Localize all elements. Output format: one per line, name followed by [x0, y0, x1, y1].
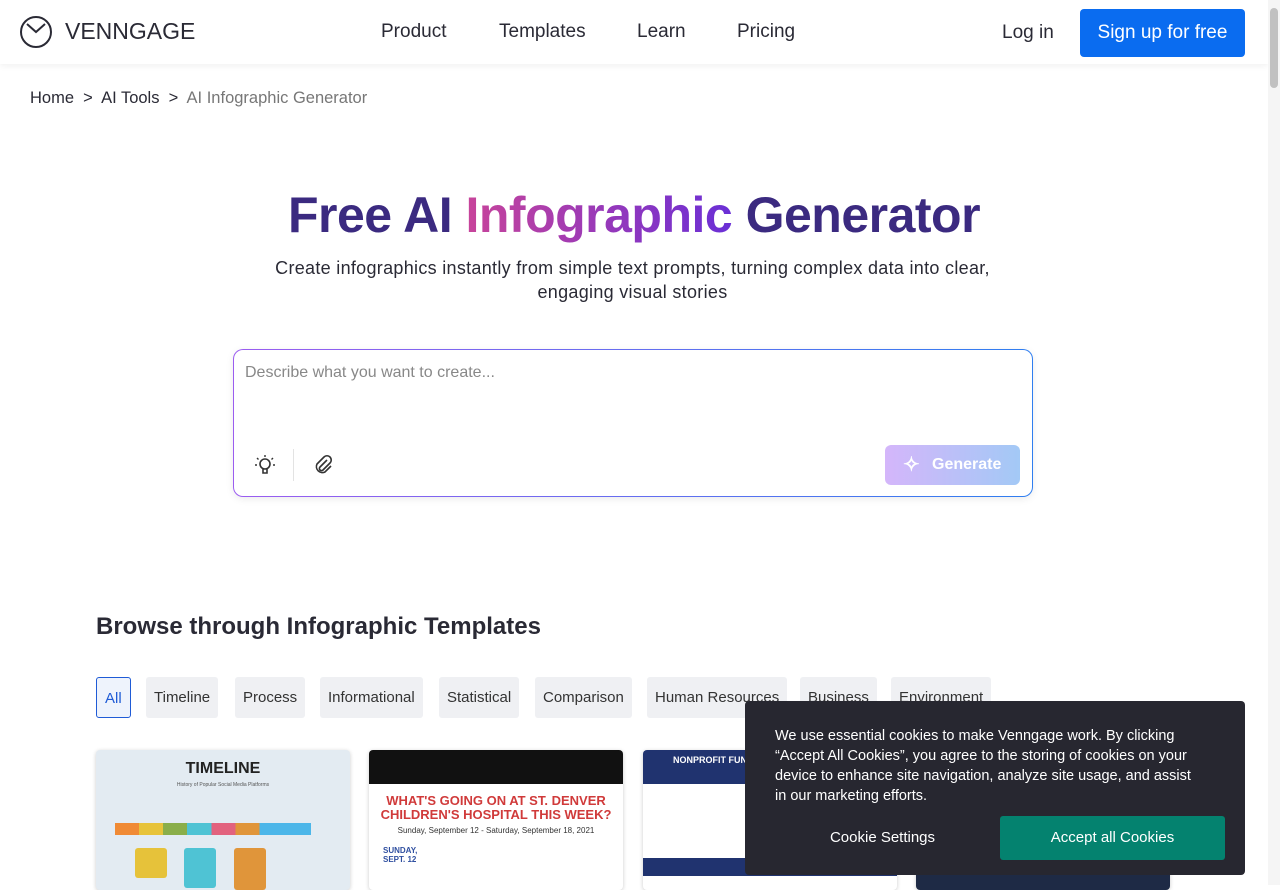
scrollbar: [1268, 0, 1280, 885]
cookie text: We use essential cookies to make Venngage work. By clicking “Accept All Cookies”, you agree to the storing of cookies on your device to enhance site navigation, analyze site usage, and assist in our marketing efforts.: [775, 728, 1191, 804]
text: Human Resources: [655, 689, 779, 706]
nav links: [381, 21, 1054, 43]
cookie settings button: Cookie Settings: [830, 829, 935, 846]
template card: nonprofit: [643, 750, 897, 890]
prompt box: [233, 349, 1033, 497]
template card: hospital: CHILDREN'S HOSPITAL THIS WEEK?: [381, 807, 611, 822]
text: Comparison: [543, 689, 624, 706]
header bar: Log in: [1002, 22, 1054, 43]
section heading: Browse through Infographic Templates: [96, 613, 541, 640]
header bar: Product: [381, 21, 446, 42]
template card: dark: [916, 750, 1170, 890]
signup button: [1080, 9, 1245, 57]
header bar: [0, 0, 1268, 64]
generate button: ✧: [903, 454, 920, 476]
template card: timeline: TIMELINE: [186, 760, 260, 777]
icon: paperclip: [316, 455, 332, 474]
placeholder: Describe what you want to create...: [245, 364, 495, 381]
template card: hospital: SUNDAY,: [383, 846, 417, 855]
template card: timeline: [96, 750, 350, 890]
template card: timeline: History of Popular Social Media Platforms: [177, 782, 269, 788]
text: Business: [808, 689, 869, 706]
header bar: Pricing: [737, 21, 795, 42]
template card: hospital: SEPT. 12: [383, 855, 416, 864]
generate button: Generate: [932, 456, 1001, 473]
header bar: Templates: [499, 21, 586, 42]
template card: hospital: [369, 750, 623, 890]
template card: hospital: WHAT'S GOING ON AT ST. DENVER: [386, 793, 606, 808]
title: Free AI Infographic Generator: [288, 187, 980, 243]
signup button: Sign up for free: [1098, 22, 1227, 43]
text: Informational: [328, 689, 415, 706]
text: Environment: [899, 689, 983, 706]
cookie banner: [745, 701, 1245, 875]
breadcrumb: Home > AI Tools > AI Infographic Generator: [30, 89, 367, 107]
logo: [20, 16, 195, 48]
text: Statistical: [447, 689, 511, 706]
accept button: Accept all Cookies: [1051, 829, 1174, 846]
template card: nonprofit: NONPROFIT FUND: [673, 755, 754, 765]
filter chips: [96, 677, 991, 718]
logo: VENNGAGE: [65, 18, 195, 44]
text: Timeline: [154, 689, 210, 706]
subtitle: Create infographics instantly from simple text prompts, turning complex data into clear, engaging visual stories: [275, 258, 990, 302]
template card: hospital: Sunday, September 12 - Saturday, September 18, 2021: [398, 826, 594, 835]
icon: bulb: [255, 455, 275, 474]
text: All: [105, 690, 122, 707]
header bar: Learn: [637, 21, 686, 42]
generate button: [885, 445, 1020, 485]
text: Process: [243, 689, 297, 706]
accept button: [1000, 816, 1225, 860]
